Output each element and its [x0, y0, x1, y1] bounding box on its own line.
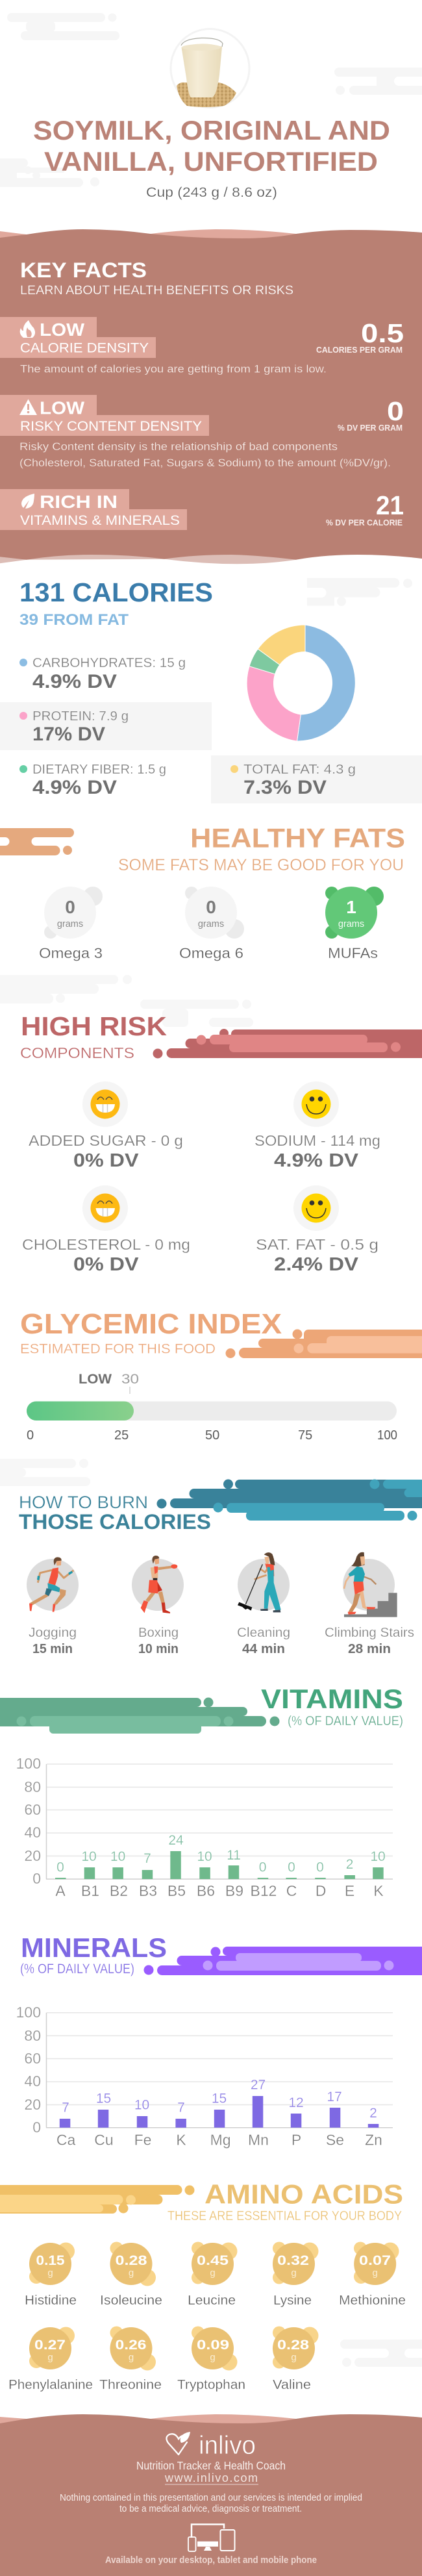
component: cholesterol — [22, 1185, 190, 1275]
decoration: header clouds — [0, 13, 422, 187]
icon: boxer — [141, 1556, 177, 1613]
website link: www.inlivo.com — [164, 2471, 258, 2484]
bar chart: vitamins: 24 — [168, 1833, 184, 1848]
heading: AMINO ACIDS — [205, 2179, 403, 2210]
bar chart: vitamins: 0 — [259, 1860, 266, 1875]
glycemic gauge — [27, 1371, 397, 1443]
glycemic gauge: LOW — [79, 1371, 112, 1387]
bar chart: minerals: 7 — [62, 2101, 69, 2115]
bar chart: minerals: 17 — [327, 2090, 342, 2104]
subheading: THESE ARE ESSENTIAL FOR YOUR BODY — [168, 2209, 402, 2223]
serving size: Cup (243 g / 8.6 oz) — [146, 185, 277, 200]
icon: devices — [188, 2524, 235, 2551]
component: sodium: SODIUM - 114 mg — [254, 1132, 380, 1149]
bar chart: minerals: Mg — [210, 2132, 231, 2149]
bar chart: vitamins: 7 — [143, 1851, 151, 1866]
fat: omega 3: Omega 3 — [39, 945, 103, 961]
amino acid: valine — [273, 2327, 318, 2392]
bar chart: vitamins: 10 — [81, 1849, 97, 1864]
amino acid: lysine: Lysine — [273, 2293, 312, 2308]
amino acid: tryptophan: Tryptophan — [177, 2377, 245, 2392]
bar chart: minerals: P — [292, 2132, 301, 2149]
fact: risky content density: Risky Content density is the relationship of bad components — [19, 440, 338, 453]
fact: vitamins and minerals: VITAMINS & MINERALS — [20, 512, 180, 528]
bar chart: vitamins: A — [55, 1882, 66, 1899]
bar chart: vitamins: 10 — [110, 1849, 125, 1864]
bar chart: minerals: 60 — [24, 2050, 41, 2067]
heading: 131 CALORIES — [19, 577, 213, 607]
fact: vitamins and minerals: % DV PER CALORIE — [326, 518, 403, 527]
amino acid: valine: g — [291, 2352, 297, 2363]
bar chart: vitamins: B9 — [225, 1882, 243, 1899]
bar chart: minerals: Fe — [134, 2132, 151, 2149]
bar chart: minerals: Zn — [365, 2132, 382, 2149]
fat: omega 3: grams — [57, 919, 83, 929]
fact: risky content density: RISKY CONTENT DENSITY — [20, 418, 202, 434]
bar chart: vitamins: 20 — [24, 1847, 41, 1864]
nutrient: protein: 17% DV — [32, 724, 105, 745]
activity: boxing: 10 min — [138, 1642, 179, 1656]
bar chart: minerals: 2 — [369, 2106, 377, 2121]
bar chart: vitamins: E — [345, 1882, 354, 1899]
decoration: red stripes — [153, 1029, 422, 1059]
activity: boxing — [132, 1556, 184, 1656]
panel: amino acids — [0, 2179, 422, 2392]
bar chart: minerals: 12 — [288, 2095, 304, 2110]
panel: how to burn those calories — [0, 1459, 422, 1656]
subheading: (% OF DAILY VALUE) — [20, 1962, 134, 1976]
bar chart: vitamins: B2 — [110, 1882, 128, 1899]
bar chart: minerals: 0 — [32, 2119, 41, 2136]
component: added sugar — [29, 1081, 183, 1171]
amino acid: isoleucine: 0.28 — [116, 2253, 147, 2268]
amino acid: isoleucine: g — [129, 2267, 134, 2279]
component: sodium: 4.9% DV — [274, 1150, 358, 1171]
bar chart: vitamins: B6 — [197, 1882, 215, 1899]
bar chart: minerals: 7 — [177, 2101, 185, 2115]
disclaimer: Nothing contained in this presentation and our services is intended or implied — [60, 2493, 362, 2503]
amino acid: tryptophan — [177, 2327, 245, 2392]
donut chart — [247, 625, 355, 741]
title: SOYMILK, ORIGINAL AND — [33, 115, 390, 145]
glycemic gauge: 100 — [377, 1428, 397, 1443]
fact: risky content density: % DV PER GRAM — [338, 423, 403, 433]
fat: omega 6: Omega 6 — [179, 945, 243, 961]
decoration: faded cloud — [340, 2340, 422, 2367]
icon: woman climbing stairs — [344, 1552, 397, 1617]
amino acid: phenylalanine — [8, 2327, 93, 2392]
bar chart: minerals: 20 — [24, 2096, 41, 2113]
bar chart: minerals: 15 — [96, 2091, 111, 2106]
decoration: calories cloud — [307, 578, 412, 606]
activity: jogging: Jogging — [29, 1626, 77, 1640]
decoration: yellow stripes — [0, 2185, 195, 2214]
bar chart: minerals: 27 — [251, 2078, 266, 2093]
decoration: purple stripes — [144, 1947, 422, 1975]
bar chart: minerals: Se — [326, 2132, 344, 2149]
title: VANILLA, UNFORTIFIED — [44, 146, 378, 177]
decoration: wave background — [0, 229, 422, 564]
fact: risky content density: (Cholesterol, Saturated Fat, Sugars & Sodium) to the amount (%DV/gr). — [19, 457, 391, 469]
nutrient: dietary fiber — [19, 763, 166, 798]
bar chart: vitamins: 2 — [346, 1857, 353, 1872]
bar chart: vitamins: B12 — [251, 1882, 277, 1899]
activity: cleaning — [237, 1552, 290, 1656]
amino acid: histidine — [25, 2242, 77, 2308]
activity: climbing stairs: 28 min — [348, 1642, 391, 1656]
amino acid: valine: Valine — [273, 2377, 311, 2392]
glycemic gauge: 30 — [121, 1371, 139, 1387]
glycemic gauge: 75 — [298, 1428, 312, 1443]
disclaimer — [60, 2493, 362, 2514]
amino acid: isoleucine: Isoleucine — [100, 2293, 162, 2308]
nutrient: dietary fiber: DIETARY FIBER: 1.5 g — [32, 763, 166, 777]
bar chart: vitamins: 10 — [370, 1849, 386, 1864]
nutrient: total fat: 7.3% DV — [243, 777, 327, 798]
subheading: 39 FROM FAT — [19, 611, 129, 629]
decoration: healthy fats stripes — [0, 828, 74, 855]
amino acid: leucine: Leucine — [188, 2293, 236, 2308]
bar chart: vitamins: 80 — [24, 1778, 41, 1795]
nutrient: carbohydrates: 4.9% DV — [32, 671, 117, 692]
decoration: teal stripes — [157, 1480, 422, 1521]
amino acid: histidine: 0.15 — [36, 2253, 65, 2268]
icon: leaf — [21, 494, 34, 509]
panel: key facts — [0, 229, 422, 564]
fat: omega 3: 0 — [65, 897, 75, 917]
heading: THOSE CALORIES — [19, 1510, 211, 1534]
panel: glycemic index — [20, 1308, 422, 1443]
bar chart: minerals: Ca — [56, 2132, 76, 2149]
panel: calories — [0, 577, 422, 803]
amino acid: lysine: g — [291, 2267, 297, 2279]
bar chart: vitamins: B1 — [81, 1882, 99, 1899]
panel: high risk — [20, 1011, 422, 1275]
subheading: LEARN ABOUT HEALTH BENEFITS OR RISKS — [20, 284, 293, 297]
bar chart: vitamins: K — [373, 1882, 384, 1899]
fact: calorie density: 0.5 — [361, 318, 404, 348]
disclaimer: to be a medical advice, diagnosis or treatment. — [119, 2504, 302, 2514]
fact: risky content density: LOW — [40, 398, 85, 418]
amino acid: threonine: 0.26 — [116, 2338, 147, 2353]
component: saturated fat: SAT. FAT - 0.5 g — [256, 1236, 379, 1253]
bar chart: minerals: 100 — [16, 2004, 41, 2021]
fat: omega 6 — [179, 887, 244, 961]
fat: omega 6: 0 — [206, 897, 216, 917]
nutrient: protein — [19, 709, 129, 745]
bar chart: vitamins: 10 — [197, 1849, 212, 1864]
amino acid: leucine: g — [210, 2267, 216, 2279]
row backgrounds — [0, 702, 422, 803]
amino acid: phenylalanine: 0.27 — [34, 2338, 66, 2353]
bar chart: minerals: 40 — [24, 2073, 41, 2090]
nutrient: total fat — [230, 763, 356, 798]
fact: calorie density: LOW — [40, 320, 85, 340]
bar chart: vitamins: 100 — [16, 1755, 41, 1772]
image: glass of soymilk — [171, 29, 249, 108]
component: saturated fat — [256, 1185, 379, 1275]
activity: climbing stairs — [325, 1552, 414, 1656]
bar chart: vitamins: B5 — [168, 1882, 186, 1899]
bar chart: vitamins: B3 — [139, 1882, 157, 1899]
amino acid: histidine: Histidine — [25, 2293, 77, 2308]
amino acid: threonine — [99, 2327, 162, 2392]
logo: inlivo — [166, 2431, 256, 2460]
amino acid: tryptophan: g — [210, 2352, 216, 2363]
subheading: SOME FATS MAY BE GOOD FOR YOU — [118, 856, 404, 874]
heading: VITAMINS — [261, 1684, 403, 1714]
fact: vitamins and minerals — [0, 489, 404, 530]
heading: HIGH RISK — [21, 1011, 167, 1041]
fact: calorie density: CALORIE DENSITY — [20, 340, 149, 356]
heading: HEALTHY FATS — [190, 822, 405, 853]
nutrient: protein: PROTEIN: 7.9 g — [32, 709, 129, 724]
amino acid: methionine: Methionine — [339, 2293, 406, 2308]
glycemic gauge: 25 — [114, 1428, 129, 1443]
bar chart: vitamins: 0 — [288, 1860, 295, 1875]
icon: flame — [20, 320, 35, 338]
amino acid: leucine: 0.45 — [197, 2253, 229, 2268]
activity: boxing: Boxing — [138, 1626, 179, 1640]
nutrient: total fat: TOTAL FAT: 4.3 g — [243, 763, 356, 777]
bar chart: vitamins: C — [286, 1882, 297, 1899]
component: cholesterol: CHOLESTEROL - 0 mg — [22, 1236, 190, 1253]
component: sodium — [254, 1081, 380, 1171]
heading: HOW TO BURN — [19, 1493, 148, 1512]
glycemic gauge: 50 — [205, 1428, 219, 1443]
tagline: Nutrition Tracker & Health Coach — [136, 2459, 286, 2472]
bar chart: vitamins: 40 — [24, 1824, 41, 1841]
component: added sugar: 0% DV — [73, 1150, 139, 1171]
decoration: faded cloud — [0, 975, 253, 1027]
heading: GLYCEMIC INDEX — [20, 1308, 282, 1340]
bar chart: vitamins: 0 — [56, 1860, 64, 1875]
heading — [19, 1493, 211, 1534]
panel: footer — [0, 2414, 422, 2576]
bar chart: minerals: 80 — [24, 2027, 41, 2044]
title — [33, 115, 390, 177]
bar chart: vitamins: 0 — [316, 1860, 324, 1875]
bar chart: minerals: 10 — [134, 2098, 149, 2113]
fat: mufas: MUFAs — [328, 945, 378, 961]
fact: vitamins and minerals: RICH IN — [40, 492, 118, 512]
icon: cleaner with broom — [238, 1552, 281, 1612]
bar chart: minerals: 15 — [212, 2091, 227, 2106]
amino acid: lysine — [273, 2242, 318, 2308]
fact: calorie density: CALORIES PER GRAM — [316, 345, 403, 355]
fact: calorie density — [0, 317, 404, 375]
amino acid: histidine: g — [47, 2267, 53, 2279]
component: cholesterol: 0% DV — [73, 1254, 139, 1275]
fact: vitamins and minerals: 21 — [376, 490, 404, 520]
activity: jogging: 15 min — [32, 1642, 73, 1656]
amino acid: lysine: 0.32 — [277, 2253, 309, 2268]
decoration: footer wave — [0, 2414, 422, 2576]
activity: cleaning: 44 min — [242, 1642, 285, 1656]
fact: risky content density: 0 — [387, 396, 404, 426]
bar chart: minerals: Cu — [94, 2132, 114, 2149]
amino acid: tryptophan: 0.09 — [197, 2338, 229, 2353]
decoration: green stripes — [0, 1698, 279, 1734]
bar chart: minerals: Mn — [248, 2132, 269, 2149]
nutrient: carbohydrates: CARBOHYDRATES: 15 g — [32, 656, 186, 670]
fat: mufas: grams — [338, 919, 364, 929]
nutrient: carbohydrates — [19, 656, 186, 692]
subheading: COMPONENTS — [20, 1044, 134, 1061]
subheading: ESTIMATED FOR THIS FOOD — [20, 1341, 216, 1356]
component: saturated fat: 2.4% DV — [274, 1254, 358, 1275]
amino acid: phenylalanine: g — [47, 2352, 53, 2363]
header — [0, 13, 422, 200]
component: added sugar: ADDED SUGAR - 0 g — [29, 1132, 183, 1149]
fact: risky content density — [0, 395, 404, 469]
availability note: Available on your desktop, tablet and mobile phone — [105, 2555, 317, 2566]
amino acid: phenylalanine: Phenylalanine — [8, 2377, 93, 2392]
amino acid: valine: 0.28 — [277, 2338, 309, 2353]
amino acid: isoleucine — [100, 2242, 162, 2308]
bar chart: vitamins: 0 — [32, 1870, 41, 1887]
amino acid: methionine — [339, 2242, 406, 2308]
decoration: orange stripes — [226, 1329, 422, 1358]
amino acid: threonine: Threonine — [99, 2377, 162, 2392]
amino acid: threonine: g — [129, 2352, 134, 2363]
panel: minerals — [16, 1932, 422, 2149]
activity: cleaning: Cleaning — [237, 1626, 290, 1640]
activity: climbing stairs: Climbing Stairs — [325, 1626, 414, 1640]
fat: mufas: 1 — [346, 897, 356, 917]
icon: jogger — [29, 1557, 73, 1612]
amino acid: methionine: g — [373, 2267, 378, 2279]
amino acid: leucine — [188, 2242, 238, 2308]
fat: omega 6: grams — [198, 919, 224, 929]
bar chart: vitamins: D — [316, 1882, 326, 1899]
heading: MINERALS — [21, 1932, 167, 1963]
bar chart: minerals: K — [176, 2132, 186, 2149]
decoration: faded cloud — [0, 1459, 90, 1486]
glycemic gauge: 0 — [27, 1428, 34, 1443]
activity: jogging — [27, 1557, 79, 1656]
fat: mufas — [325, 887, 384, 961]
fat: omega 3 — [39, 887, 103, 961]
bar chart: vitamins — [16, 1755, 393, 1899]
icon: warning triangle — [19, 399, 37, 415]
nutrient: dietary fiber: 4.9% DV — [32, 777, 117, 798]
fact: calorie density: The amount of calories you are getting from 1 gram is low. — [20, 362, 327, 375]
bar chart: vitamins: 11 — [227, 1848, 241, 1863]
amino acid: methionine: 0.07 — [359, 2253, 391, 2268]
subheading: (% OF DAILY VALUE) — [288, 1714, 403, 1728]
bar chart: vitamins: 60 — [24, 1801, 41, 1818]
panel: vitamins — [0, 1684, 403, 1899]
logo: inlivo: inlivo — [199, 2431, 256, 2460]
bar chart: minerals — [16, 2004, 393, 2149]
heading: KEY FACTS — [20, 259, 147, 282]
panel: healthy fats — [0, 822, 405, 1027]
